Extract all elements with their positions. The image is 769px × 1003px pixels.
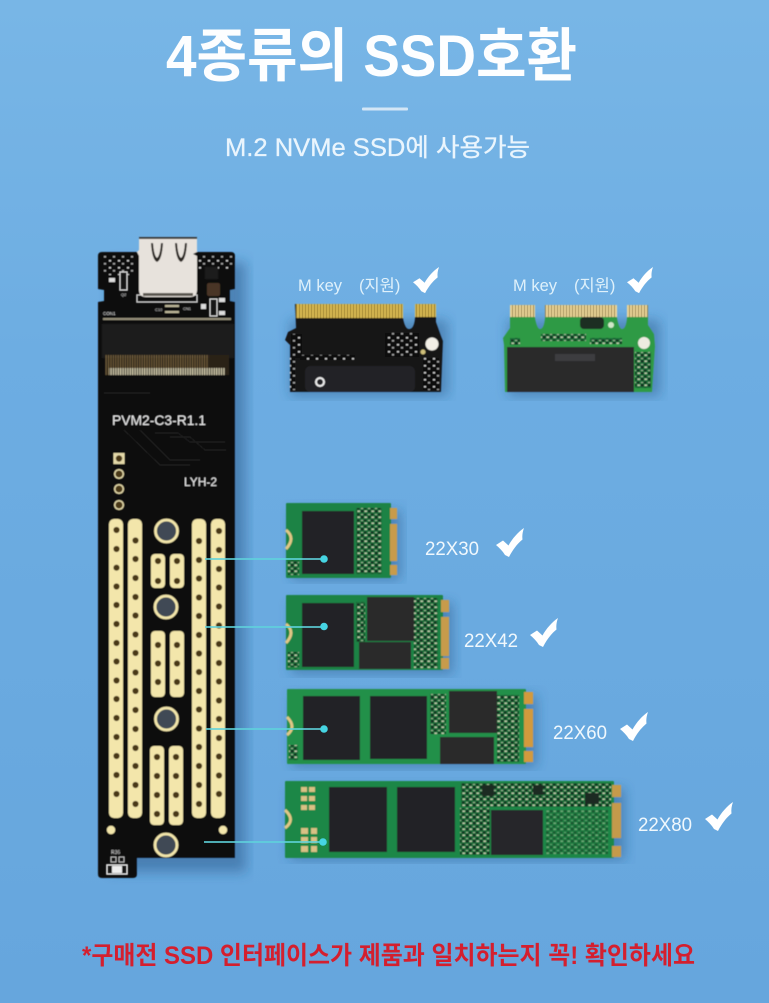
icon: check 22X60 xyxy=(620,712,648,741)
chips xyxy=(303,691,497,764)
SSD 22X60 xyxy=(287,689,537,767)
components xyxy=(497,695,519,762)
enclosure circuit board xyxy=(98,237,246,878)
chip xyxy=(305,366,415,392)
components xyxy=(356,508,382,574)
leader line 22X80 xyxy=(204,838,327,846)
footer warning: *구매전 SSD 인터페이스가 제품과 일치하는지 꼭! 확인하세요 xyxy=(82,942,695,970)
leader line 22X42 xyxy=(205,623,328,630)
components xyxy=(461,783,611,807)
top components: CON1 xyxy=(103,311,116,316)
icon: check M key green xyxy=(627,267,653,293)
top components: C10 xyxy=(155,307,163,312)
mounting rings xyxy=(155,520,178,856)
LED marking xyxy=(107,850,127,874)
gold short pads xyxy=(150,554,184,825)
title divider xyxy=(362,108,408,110)
strip holes xyxy=(113,527,222,817)
components xyxy=(580,317,604,329)
M key SSD black xyxy=(285,304,448,396)
chip xyxy=(507,347,634,392)
chip xyxy=(302,511,354,574)
top components: Q2 xyxy=(121,292,127,297)
mounting dot xyxy=(638,337,650,349)
gold connector xyxy=(612,785,621,857)
board shadow xyxy=(110,262,246,872)
SSD 22X42 xyxy=(286,595,453,674)
label: M key black: M key xyxy=(298,277,343,295)
edge notch xyxy=(285,810,290,828)
label: M key black: (지원) xyxy=(359,276,400,295)
pcb xyxy=(286,595,443,670)
components xyxy=(356,602,365,642)
shadow xyxy=(291,510,401,580)
SSD 22X80 xyxy=(285,781,625,860)
chips xyxy=(302,597,414,669)
chip print xyxy=(555,354,595,361)
LED marking: R36 xyxy=(111,850,120,856)
pcb xyxy=(285,304,443,392)
header pins xyxy=(114,453,124,509)
label: 22X30: 22X30 xyxy=(425,539,479,560)
small corner pads xyxy=(107,826,227,834)
gold fingers xyxy=(296,304,403,318)
icon: check 22X80 xyxy=(705,802,733,831)
gold pads xyxy=(301,787,317,852)
board model label: PVM2-C3-R1.1 xyxy=(112,413,206,428)
pcb xyxy=(285,781,614,858)
board traces xyxy=(104,393,226,465)
logo xyxy=(316,378,324,386)
leader line 22X30 xyxy=(205,555,328,563)
label: 22X42: 22X42 xyxy=(464,631,518,652)
gold connector xyxy=(524,692,533,762)
shadow xyxy=(291,602,453,674)
components xyxy=(385,333,419,357)
mounting dot xyxy=(426,338,438,350)
edge notch xyxy=(287,717,292,735)
pcb xyxy=(286,503,391,578)
USB-C connector xyxy=(137,237,197,302)
icon: check M key black xyxy=(413,267,439,293)
icon: check 22X42 xyxy=(530,618,558,647)
edge notch xyxy=(286,530,291,549)
label: 22X80: 22X80 xyxy=(638,815,692,836)
title: 4종류의 SSD호환 xyxy=(166,24,577,89)
top components: CN1 xyxy=(183,306,192,311)
label: 22X60: 22X60 xyxy=(553,723,607,744)
gold connector xyxy=(441,600,449,669)
pcb xyxy=(287,689,526,764)
subtitle: M.2 NVMe SSD에 사용가능 xyxy=(225,134,530,162)
board outline xyxy=(98,252,235,878)
shadow xyxy=(292,695,537,767)
top components xyxy=(103,255,232,316)
shadow xyxy=(290,320,448,396)
board revision label: LYH-2 xyxy=(184,475,217,489)
label: M key green: M key xyxy=(513,277,558,295)
M key SSD green xyxy=(503,305,660,396)
chips xyxy=(329,787,543,855)
shadow xyxy=(290,788,625,860)
SSD 22X30 xyxy=(286,503,401,580)
icon: check 22X30 xyxy=(496,528,524,557)
leader line 22X60 xyxy=(206,725,328,733)
shadow xyxy=(508,320,660,396)
M.2 slot xyxy=(102,318,234,375)
gold long strips xyxy=(109,519,225,818)
edge notch xyxy=(286,624,291,643)
gold connector xyxy=(390,508,397,575)
pcb xyxy=(503,305,655,392)
small dark parts xyxy=(482,785,599,804)
gold fingers xyxy=(510,305,535,317)
label: M key green: (지원) xyxy=(574,276,615,295)
